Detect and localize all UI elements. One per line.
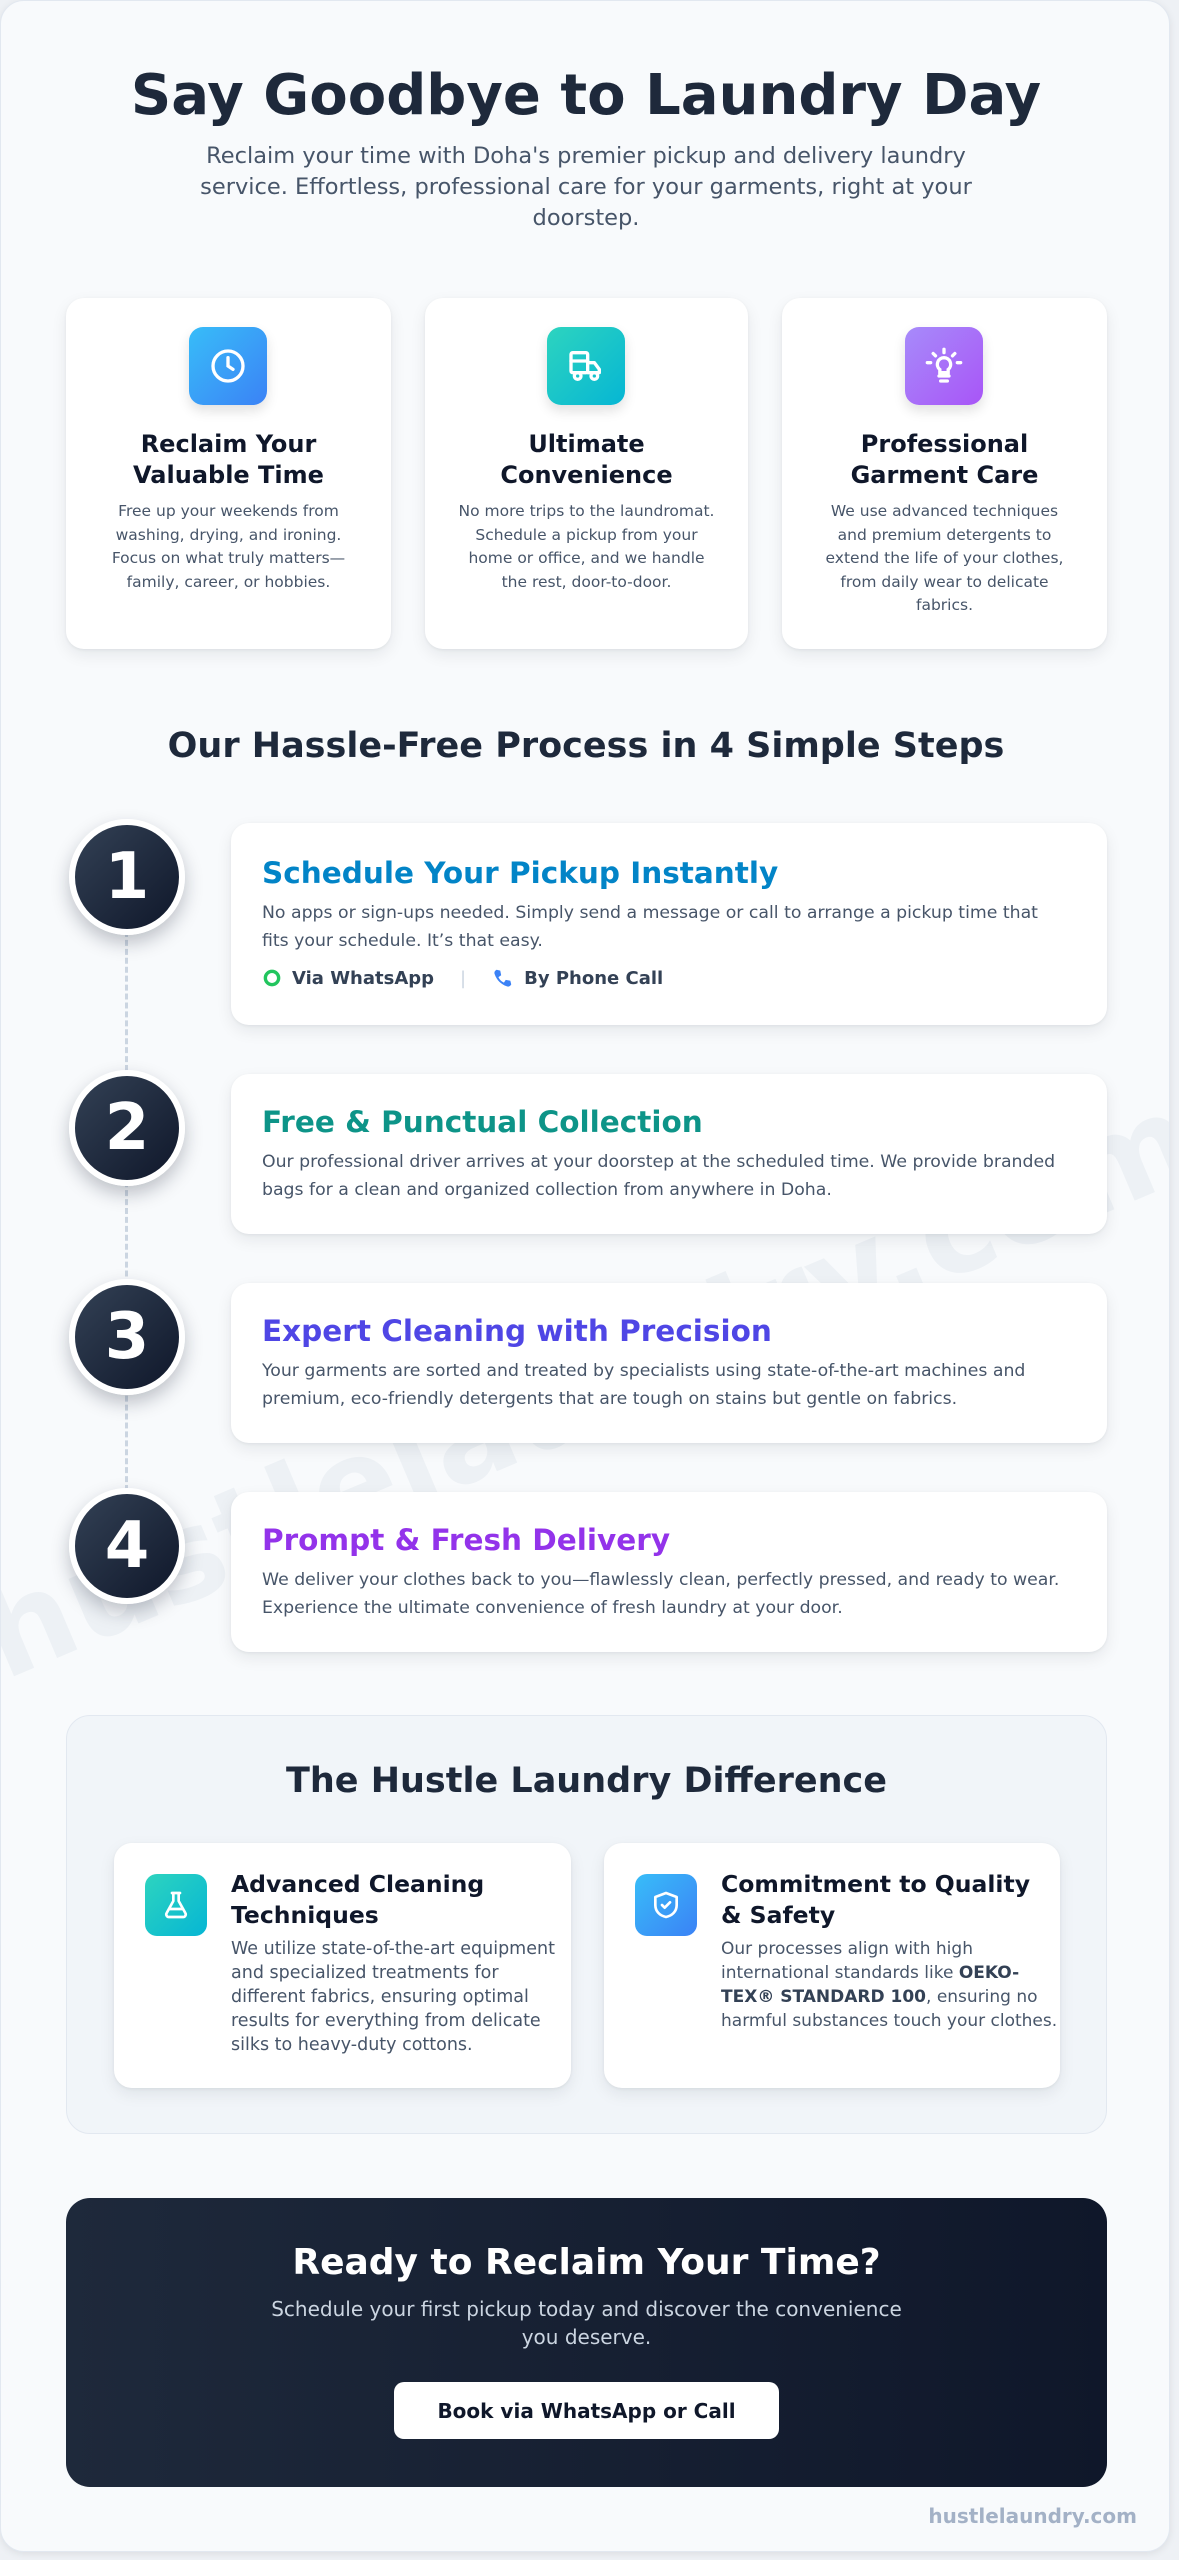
dashed timeline <box>125 931 128 1491</box>
step 1 card <box>231 823 1107 1025</box>
icon: clock <box>189 327 267 405</box>
feature card: time <box>66 298 391 649</box>
step 3 card <box>231 1283 1107 1443</box>
text: Free up your weekends from washing, drying, and ironing. Focus on what truly matters—family, career, or hobbies. <box>112 502 345 590</box>
panel: call to action <box>66 2198 1107 2487</box>
section heading: process: Our Hassle-Free Process in 4 Simple Steps <box>168 726 1004 766</box>
title: Say Goodbye to Laundry Day <box>131 63 1041 128</box>
text: We use advanced techniques and premium detergents to extend the life of your clothes, from daily wear to delicate fabrics. <box>826 502 1063 614</box>
icon: truck <box>547 327 625 405</box>
step 2 number: 2 <box>105 1091 149 1165</box>
contact options: Via WhatsApp <box>292 968 434 988</box>
step 3 number: 3 <box>105 1300 149 1374</box>
feature card: convenience <box>425 298 748 649</box>
icon: flask <box>145 1874 207 1936</box>
text: Schedule your first pickup today and discover the convenience you deserve. <box>271 2297 902 2349</box>
heading <box>133 430 324 489</box>
step 1 number: 1 <box>105 840 149 914</box>
step 2 number <box>69 1070 185 1186</box>
step 4 number: 4 <box>105 1509 149 1583</box>
title: Commitment to Quality & Safety <box>721 1870 1030 1929</box>
heading: Ultimate <box>528 430 645 458</box>
step text: No apps or sign-ups needed. Simply send a message or call to arrange a pickup time that fits your schedule. It’s that easy. <box>262 903 1038 951</box>
step 3 number <box>69 1279 185 1395</box>
panel: difference <box>66 1715 1107 2134</box>
heading <box>500 430 673 489</box>
step text: We deliver your clothes back to you—flawlessly clean, perfectly pressed, and ready to wear. Experience the ultimate convenience of fresh laundry at your door. <box>262 1570 1059 1618</box>
heading: Professional <box>861 430 1028 458</box>
title: Advanced Cleaning Techniques <box>231 1870 484 1929</box>
contact options: | <box>460 968 466 988</box>
step title: Prompt & Fresh Delivery <box>262 1523 670 1557</box>
subtitle: Reclaim your time with Doha's premier pickup and delivery laundry service. Effortless, professional care for your garments, right at your doorstep. <box>200 143 972 231</box>
step 1 number <box>69 819 185 935</box>
heading: The Hustle Laundry Difference <box>286 1761 887 1801</box>
heading: Reclaim Your <box>141 430 316 458</box>
step 4 number <box>69 1488 185 1604</box>
step text: Our professional driver arrives at your doorstep at the scheduled time. We provide branded bags for a clean and organized collection from anywhere in Doha. <box>262 1152 1055 1200</box>
heading: Valuable Time <box>133 461 324 489</box>
text: Our processes align with high international standards like OEKO- TEX® STANDARD 100, ensuring no harmful substances touch your clothes. <box>721 1939 1057 2031</box>
button: Book via WhatsApp or Call <box>437 2398 736 2422</box>
step 4 card <box>231 1492 1107 1652</box>
feature card: care <box>782 298 1107 649</box>
heading <box>851 430 1038 489</box>
contact options: By Phone Call <box>524 968 663 988</box>
button <box>394 2382 779 2439</box>
heading: Convenience <box>500 461 673 489</box>
step 2 card <box>231 1074 1107 1234</box>
text: We utilize state-of-the-art equipment and specialized treatments for different fabrics, ensuring optimal results for everything from delicate silks to heavy-duty cottons. <box>231 1939 555 2055</box>
card: quality <box>604 1843 1060 2088</box>
step title: Schedule Your Pickup Instantly <box>262 856 778 890</box>
icon: shield <box>635 1874 697 1936</box>
step title: Expert Cleaning with Precision <box>262 1314 772 1348</box>
card: advanced cleaning <box>114 1843 571 2088</box>
footer url: hustlelaundry.com <box>928 2504 1137 2528</box>
step title: Free & Punctual Collection <box>262 1105 703 1139</box>
contact options <box>264 968 663 988</box>
step text: Your garments are sorted and treated by specialists using state-of-the-art machines and premium, eco-friendly detergents that are tough on stains but gentle on fabrics. <box>262 1361 1025 1409</box>
heading: Ready to Reclaim Your Time? <box>292 2242 881 2283</box>
heading: Garment Care <box>851 461 1038 489</box>
text: No more trips to the laundromat. Schedule a pickup from your home or office, and we handle the rest, door-to-door. <box>459 502 714 590</box>
icon: bulb <box>905 327 983 405</box>
